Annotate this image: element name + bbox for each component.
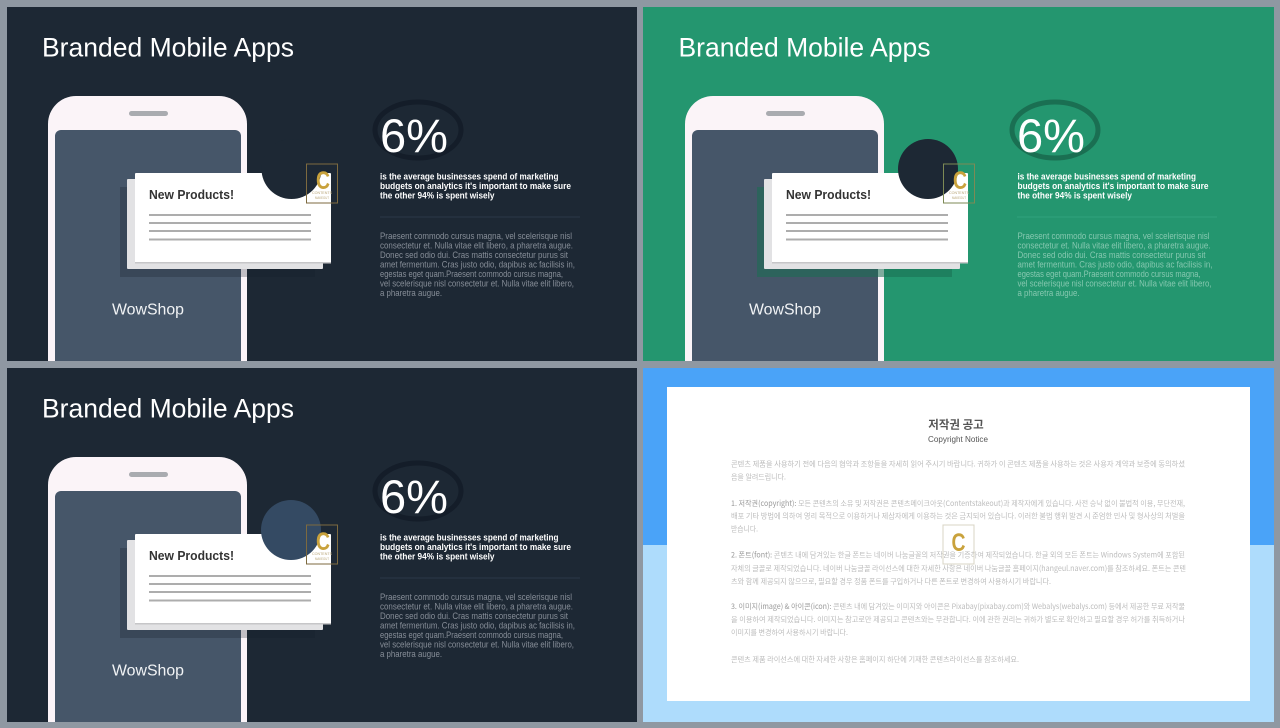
closing note: 콘텐츠 제품 라이선스에 대한 자세한 사항은 홈페이지 하단에 기재한 콘텐츠라이선스를 참조하세요. (731, 654, 1019, 665)
statistic: 6%: 6% (380, 470, 448, 523)
body text: consectetur et. Nulla vitae elit libero, a pharetra augue. (380, 602, 573, 612)
body text: egestas eget quam.Praesent commodo cursus magna, (380, 269, 563, 279)
watermark (306, 164, 338, 203)
statistic: 6%: 6% (380, 109, 448, 162)
lead text: is the average businesses spend of marketing (380, 172, 558, 182)
phone illustration (48, 96, 247, 361)
lead text: budgets on analytics it's important to make sure (1018, 181, 1209, 191)
section 3: image and icon (731, 601, 1185, 638)
watermark (944, 164, 974, 203)
statistic: 6% (1012, 102, 1098, 162)
body text: amet fermentum. Cras justo odio, dapibus ac facilisis in, (380, 620, 575, 630)
lead text (380, 532, 571, 562)
phone illustration (685, 96, 884, 361)
statistic: 6% (375, 463, 461, 523)
body text: consectetur et. Nulla vitae elit libero, a pharetra augue. (1018, 240, 1210, 250)
watermark: CONTENTS (312, 551, 332, 556)
copyright heading: 저작권 공고 (928, 416, 984, 432)
body text: egestas eget quam.Praesent commodo cursus magna, (1018, 269, 1200, 279)
watermark: C (952, 529, 966, 557)
intro paragraph: 음을 알려드립니다. (731, 472, 786, 482)
copyright heading: Copyright Notice (928, 434, 988, 444)
section 1: copyright: 배포 기타 방법에 의하여 영리 목적으로 이용하거나 제삼자에게 이용하는 것은 금지되어 있습니다. 이러한 불법 행위 발견 시 준엄한 민사 및 형사상의 처벌을 (731, 510, 1185, 522)
body text: egestas eget quam.Praesent commodo cursus magna, (380, 630, 563, 640)
body text (1018, 231, 1212, 298)
notification card (120, 534, 331, 638)
section 3: image and icon: 이미지를 변경하여 사용하시기 바랍니다. (731, 627, 848, 638)
watermark: MAKEOUT (315, 556, 329, 561)
body text: vel scelerisque nisl consectetur et. Nulla vitae elit libero, (1018, 278, 1212, 288)
watermark: C (316, 167, 330, 195)
copyright heading (928, 416, 988, 444)
watermark: MAKEOUT (952, 195, 966, 200)
notification card (120, 173, 331, 277)
accent circle (898, 139, 958, 199)
lead text: budgets on analytics it's important to make sure (380, 542, 571, 552)
body text: vel scelerisque nisl consectetur et. Nulla vitae elit libero, (380, 278, 574, 288)
panel: dark slide top left (7, 7, 637, 361)
section 3: image and icon: 3. 이미지(image) & 아이콘(icon): 콘텐츠 내에 담겨있는 이미지와 아이콘은 Pixabay(pixabay.com)와 Webalys(webalys.com) 등에서 제공한 무료 저작물 (731, 601, 1185, 612)
body text: Donec sed odio dui. Cras mattis consectetur purus sit (380, 250, 568, 260)
body text: Donec sed odio dui. Cras mattis consectetur purus sit (1018, 250, 1206, 260)
body text: Praesent commodo cursus magna, vel scelerisque nisl (380, 231, 572, 241)
section 1: copyright (731, 498, 1185, 534)
body text: Praesent commodo cursus magna, vel scelerisque nisl (380, 592, 572, 602)
section 3: image and icon: 을 이용하여 제작되었습니다. 이미지는 참고로만 제공되고 콘텐츠와는 무관합니다. 이에 관한 권리는 귀하가 별도로 확인하고 필요할 경우 허가를 취득하거나 (731, 614, 1185, 625)
phone illustration (48, 457, 247, 722)
body text: amet fermentum. Cras justo odio, dapibus ac facilisis in, (380, 260, 575, 270)
body text: Praesent commodo cursus magna, vel scelerisque nisl (1018, 231, 1210, 241)
lead text: the other 94% is spent wisely (1018, 190, 1132, 200)
body text: consectetur et. Nulla vitae elit libero, a pharetra augue. (380, 240, 573, 250)
title: Branded Mobile Apps (42, 32, 294, 62)
body text (380, 592, 575, 659)
accent circle (262, 139, 322, 199)
title: Branded Mobile Apps (678, 32, 930, 62)
lead text (1018, 172, 1209, 200)
lead text: budgets on analytics it's important to make sure (380, 181, 571, 191)
section 1: copyright: 1. 저작권(copyright): 모든 콘텐츠의 소유 및 저작권은 콘텐츠메이크아웃(Contentstakeout)과 제작자에게 있습니다. 사전 승낙 없이 불법적 이용, 무단전재, (731, 498, 1185, 509)
watermark (943, 525, 974, 564)
section 2: font (731, 550, 1186, 587)
section 1: copyright: 받습니다. (731, 524, 758, 534)
panel: dark slide bottom left (7, 368, 637, 722)
watermark: CONTENTS (312, 190, 332, 195)
statistic: 6%: 6% (1017, 109, 1085, 162)
lead text: is the average businesses spend of marketing (1018, 172, 1196, 182)
body text: a pharetra augue. (380, 288, 442, 298)
lead text: the other 94% is spent wisely (380, 552, 495, 562)
title: Branded Mobile Apps (42, 394, 294, 424)
body text: Donec sed odio dui. Cras mattis consectetur purus sit (380, 611, 568, 621)
body text: a pharetra augue. (380, 649, 442, 659)
watermark: MAKEOUT (315, 195, 329, 200)
lead text: the other 94% is spent wisely (380, 190, 495, 200)
notification card (757, 173, 968, 277)
watermark (306, 525, 338, 564)
panel: copyright notice slide (643, 368, 1274, 722)
body text: a pharetra augue. (1018, 288, 1080, 298)
phone illustration: WowShop (749, 302, 821, 318)
phone illustration: WowShop (112, 302, 184, 318)
notification card: New Products! (149, 548, 234, 563)
body text: amet fermentum. Cras justo odio, dapibus ac facilisis in, (1018, 260, 1212, 270)
intro paragraph: 콘텐츠 제품을 사용하기 전에 다음의 협약과 조항들을 자세히 읽어 주시기 바랍니다. 귀하가 이 콘텐츠 제품을 사용하는 것은 사용자 계약과 보증에 동의하셨 (731, 458, 1185, 470)
section 2: font: 츠와 함께 제공되지 않으므로, 필요할 경우 정품 폰트를 구입하거나 다른 폰트로 변경하여 사용하시기 바랍니다. (731, 576, 1051, 587)
body text: vel scelerisque nisl consectetur et. Nulla vitae elit libero, (380, 640, 574, 650)
intro paragraph (731, 458, 1185, 482)
section 2: font: 2. 폰트(font): 콘텐츠 내에 담겨있는 한글 폰트는 네이버 나눔글꼴의 저작권을 기증하여 제작되었습니다. 한글 외의 모든 폰트는 Windows System에 포함된 (731, 550, 1185, 560)
watermark: CONTENTS (949, 190, 969, 195)
watermark: C (316, 528, 330, 556)
accent circle (261, 500, 321, 560)
notification card: New Products! (786, 187, 871, 202)
lead text: is the average businesses spend of marketing (380, 532, 558, 542)
watermark: C (953, 167, 967, 195)
notification card: New Products! (149, 187, 234, 202)
statistic: 6% (375, 102, 461, 162)
phone illustration: WowShop (112, 662, 184, 680)
lead text (380, 172, 571, 200)
body text (380, 231, 575, 298)
section 2: font: 자체의 글꼴로 제작되었습니다. 네이버 나눔글꼴 라이선스에 대한 자세한 사항은 네이버 나눔글꼴 홈페이지(hangeul.naver.com)를 참조하세요. 폰트는 콘텐 (731, 563, 1186, 574)
panel: green slide top right (643, 7, 1274, 361)
